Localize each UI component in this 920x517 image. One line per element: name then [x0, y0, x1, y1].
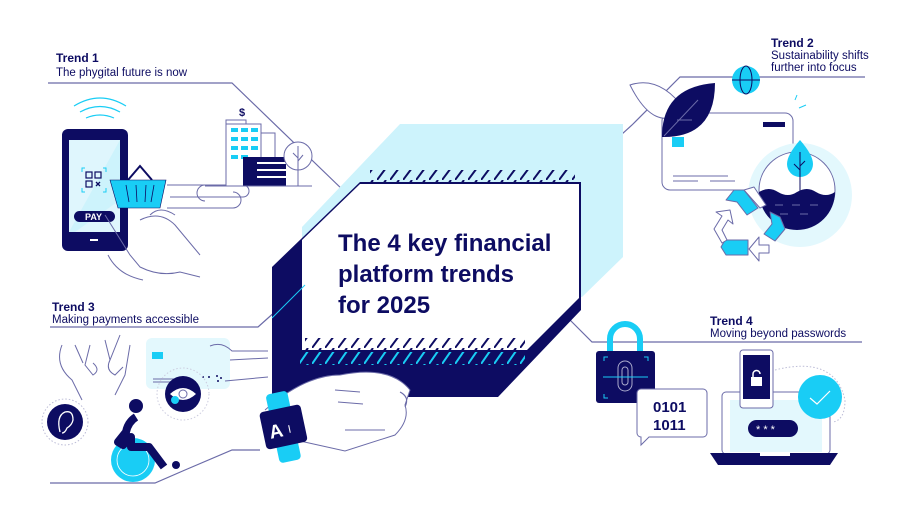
- heading: trend 4: Trend 4: [710, 314, 753, 328]
- illustration: trend 4 passwords: [596, 324, 845, 465]
- heading: trend 4: Moving beyond passwords: [710, 328, 846, 340]
- illustration: trend 3 accessibility: [42, 335, 268, 482]
- illustration: trend 1 phygital: [62, 98, 312, 280]
- connector lines: [48, 77, 865, 483]
- heading: trend 2: Sustainability shifts: [771, 50, 869, 62]
- illustration: trend 4 passwords: 1011: [653, 417, 686, 434]
- illustration: trend 4 passwords: 0101: [653, 399, 686, 416]
- illustration: trend 2 sustainability: [630, 66, 852, 261]
- heading: trend 2: further into focus: [771, 62, 857, 74]
- illustration: trend 1 phygital: $: [239, 107, 245, 119]
- heading: trend 2: [771, 36, 869, 74]
- title line 3: for 2025: [338, 292, 430, 319]
- recycle symbol: [714, 187, 785, 261]
- illustration: smartwatch AI: [256, 372, 410, 466]
- illustration: trend 1 phygital: PAY: [85, 212, 102, 222]
- heading: trend 3: [52, 300, 199, 326]
- heading: trend 2: Trend 2: [771, 36, 814, 50]
- illustration: trend 4 passwords: * * *: [756, 424, 776, 436]
- heading: trend 1: Trend 1: [56, 51, 99, 65]
- heading: trend 1: The phygital future is now: [56, 67, 188, 79]
- heading: trend 4: [710, 314, 846, 340]
- illustration: smartwatch AI: I: [287, 424, 292, 436]
- central panel: title card: [272, 124, 623, 397]
- heading: trend 3: Trend 3: [52, 300, 95, 314]
- title: The 4 key financial: [338, 230, 551, 257]
- title line 2: platform trends: [338, 261, 514, 288]
- heading: trend 3: Making payments accessible: [52, 314, 199, 326]
- heading: trend 1: [56, 51, 188, 79]
- illustration: smartwatch AI: A: [267, 420, 285, 444]
